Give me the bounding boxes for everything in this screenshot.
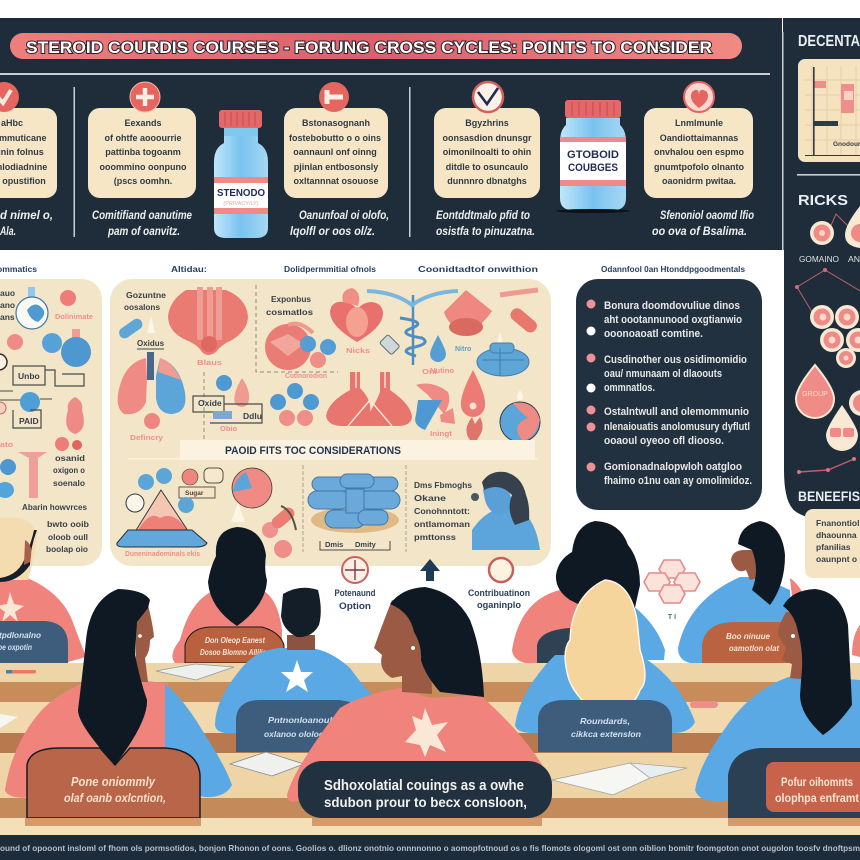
icon: hexagon cluster: T I	[668, 614, 676, 621]
person: front row left	[5, 589, 232, 826]
icon: hexagon cluster	[644, 560, 700, 621]
icon: lungs	[118, 352, 186, 414]
bullet text: ooonoaoatl comtine.	[604, 328, 703, 340]
card 3: oxltannnat osouose	[293, 176, 379, 186]
card 3: pjinlan entbosonsly	[294, 162, 378, 172]
card 3	[284, 108, 388, 198]
label: potential options: Option	[339, 601, 371, 611]
icon: top organ	[168, 287, 248, 355]
icon: hat organ	[444, 290, 492, 336]
left paper	[0, 714, 18, 728]
caption 1: Ala.	[0, 226, 16, 238]
caption 5: oo ova of Bsalima.	[652, 226, 747, 238]
bullet text: oau/ nmunaam ol dlaoouts	[604, 368, 722, 380]
text block: left middle: oxigon o	[53, 465, 85, 475]
caption 3: lqolfl or oos ol/z.	[290, 226, 375, 238]
main panel: anatomy and pills: Nnuic.	[503, 445, 523, 454]
chair: brown right	[702, 622, 790, 663]
chair: blue right: Roundards,	[580, 716, 630, 726]
left panel: anatomy: Dolinimate	[55, 312, 93, 321]
icon: minus badge	[319, 82, 349, 112]
chair: blue centre: Pntnonloanoul	[268, 715, 333, 725]
icon: pink sphere	[232, 468, 272, 508]
column headings: Altidau:	[171, 264, 207, 274]
icon: sphere	[500, 402, 540, 442]
icon: caduceus	[367, 291, 458, 365]
card 2: of ohtfe aooourrie	[104, 133, 182, 143]
caption 4	[436, 210, 535, 238]
icon: badge 1	[0, 82, 19, 112]
card 3: oannaunl onf oinng	[293, 147, 377, 157]
bullets	[586, 300, 596, 472]
icon: pyramid diagram	[117, 468, 223, 558]
bullet text: ooaoul oyeoo ofl diooso.	[604, 435, 724, 447]
risks diagram: GROUP	[802, 391, 828, 398]
pen	[6, 670, 36, 674]
desk rows	[0, 663, 860, 835]
chair: brown front left: olaf oanb oxlcntion,	[64, 793, 166, 805]
card 4: Bgyzhrins	[465, 118, 509, 128]
chair: brown right: oamotlon olat	[729, 643, 780, 653]
text block: woman caption: Okane	[414, 493, 446, 503]
card 2: ooommino oonpuno	[100, 162, 187, 172]
text block: left bottom	[46, 519, 89, 554]
book left	[230, 752, 304, 776]
chair: brown front left	[25, 748, 201, 826]
bottle 1: (PRIVACY/LY)	[223, 201, 259, 207]
chair: blue: tpdlonalno	[0, 630, 41, 640]
caption 1: d nimel o,	[0, 210, 53, 222]
icon: white arrow 2	[496, 332, 504, 348]
bottle 2	[556, 100, 630, 213]
card 4: oimonilnoalti to ohin	[443, 147, 531, 157]
benefits card: dhaounna	[816, 530, 857, 540]
callout: dark speech box: Sdhoxolatial couings as a owhe	[324, 777, 524, 794]
card 2: pattinba togoanm	[105, 147, 181, 157]
icon: paired organs	[326, 372, 412, 426]
caption 5: Sfenoniol oaomd lfio	[660, 210, 754, 222]
bullet text	[604, 300, 752, 487]
text block: woman caption	[414, 480, 472, 542]
icon: pink drop	[461, 370, 485, 417]
card 5: Lnmlmunle	[675, 118, 723, 128]
icon: pyramid diagram: Sugar	[185, 490, 204, 497]
main panel: anatomy and pills: Iningt	[430, 429, 453, 438]
chair: brown: Don Oleop Eanest	[205, 635, 266, 645]
paper sheet	[156, 664, 234, 680]
card 4	[434, 108, 540, 198]
pink pill on desk	[690, 701, 718, 708]
main panel: anatomy and pills: Blaus	[197, 358, 222, 367]
icon: blue tablet stack	[308, 474, 400, 533]
card 4: dunnnro dbnatghs	[447, 176, 527, 186]
chair: blue right: cikkca extenslon	[571, 729, 641, 739]
bottle 2: GTOBOID	[567, 149, 619, 161]
text block: left bottom: boolap oio	[46, 544, 88, 554]
icon: blue woman portrait	[472, 472, 540, 550]
card 3: Bstonasognanh	[302, 118, 370, 128]
card 4: ditdle to osuncaulo	[446, 162, 529, 172]
panel: dark bullet list	[576, 279, 762, 510]
subheading strip	[128, 440, 538, 460]
icon: pink-blue figure	[415, 384, 449, 430]
icon: white arrow	[147, 316, 155, 333]
icon: stomach organ	[265, 324, 313, 370]
caption 3	[290, 210, 389, 238]
person: row two right, blond hair	[515, 580, 695, 752]
chair: brown	[185, 627, 284, 663]
left panel: anatomy: Abarin howvrces	[22, 502, 87, 512]
chair: brown right: Boo ninuue	[726, 631, 770, 641]
label: contributing example	[468, 588, 530, 610]
bullet text: ommnatlos.	[604, 382, 655, 394]
title pill	[10, 33, 742, 59]
bracket label: Dmis	[325, 540, 343, 549]
caption 2: pam of oanvitz.	[107, 226, 180, 238]
bullet text: Bonura doomdovuliue dinos	[604, 300, 740, 312]
chair: blue centre	[236, 700, 350, 752]
chair: blue centre: oxlanoo ololoo	[264, 729, 324, 739]
text block: left top: ans	[0, 312, 15, 322]
gantt chart card	[798, 59, 860, 162]
chair: blue	[0, 621, 68, 663]
text block: left top: auo	[0, 288, 15, 298]
card 3: fostebobutto o o oins	[289, 133, 381, 143]
card 5	[644, 108, 753, 198]
benefits card	[805, 509, 860, 578]
icon: check badge	[473, 82, 503, 112]
icon: heart badge	[684, 82, 714, 112]
text block: left top	[0, 288, 15, 322]
chair: brown: Dosoo Blomno Alliliaa	[200, 647, 270, 657]
label: potential options: Potenaund	[334, 588, 376, 598]
text: expanded cosmetics: Exponbus	[271, 294, 311, 304]
main panel: anatomy and pills	[110, 279, 551, 566]
main panel: anatomy and pills: Nicks	[346, 346, 370, 355]
person: front row right	[695, 589, 860, 826]
main panel: anatomy and pills: Oxidus	[137, 338, 164, 348]
main panel: anatomy and pills: Cotlnorodion	[285, 371, 327, 380]
icon: pink ball	[60, 290, 76, 306]
column headings: Coonidtadtof onwithion	[418, 264, 538, 274]
icon: plus option	[342, 557, 368, 583]
column headings: Odannfool 0an Htonddpgoodmentals	[601, 264, 745, 274]
person: back row right, dark hair over blond	[512, 521, 665, 663]
main panel: anatomy and pills: Nutino	[430, 366, 454, 375]
callout: dark speech box: sdubon prour to becx consloon,	[324, 794, 527, 810]
main panel: anatomy and pills: Defincry	[130, 433, 164, 442]
card 5: Oandiottaimannas	[660, 133, 738, 143]
text block: woman caption: ontlamoman	[414, 519, 470, 529]
column headings	[0, 264, 745, 274]
person: row two centre, man in blue	[215, 588, 373, 752]
risks diagram: GOMAINO	[799, 255, 839, 264]
chair: brown front left: Pone oniommly	[71, 775, 156, 789]
icon: pyramid diagram: Duneninadominals ekis	[125, 549, 200, 558]
text block: left top: ano	[0, 300, 15, 310]
title pill: STEROID COURDIS COURSES - FORUNG CROSS CYCLES: POINTS TO CONSIDER	[26, 38, 712, 57]
card 2: (pscs oomhn.	[114, 176, 172, 186]
bullet text: aht oootannunood oxgtianwio	[604, 314, 742, 326]
bottle 2: COUBGES	[568, 162, 618, 174]
caption 2	[92, 210, 193, 238]
icon: pink capsule	[508, 306, 539, 335]
risks diagram	[795, 206, 860, 474]
bracket label: Dmity	[355, 540, 377, 549]
person: back row centre	[172, 527, 284, 663]
icon: blue drop	[430, 335, 446, 362]
callout: dark speech box	[298, 761, 552, 826]
icon: plus badge	[130, 82, 160, 112]
arrow up	[420, 559, 440, 581]
person: back row far right	[678, 521, 860, 663]
caption 1	[0, 210, 53, 238]
bullet text: Ostalntwull and olemommunio	[604, 406, 749, 418]
icon: heart organ	[330, 288, 383, 342]
left panel: anatomy: Unbo	[18, 371, 40, 381]
left panel: anatomy: PAID	[19, 416, 39, 426]
heading: risks: RICKS	[798, 192, 848, 209]
text block: left middle: soenalo	[53, 478, 85, 488]
icon: blue flask	[61, 329, 91, 367]
card 2: Eexands	[124, 118, 162, 128]
benefits card: oaunpnt o	[816, 554, 857, 564]
subheading strip: PAOID FITS TOC CONSIDERATIONS	[225, 445, 401, 457]
right panel	[782, 18, 860, 578]
main panel: anatomy and pills: Oxide	[198, 398, 222, 408]
main panel: anatomy and pills: Obio	[220, 424, 237, 433]
icon: pink organ	[66, 397, 84, 434]
open book right	[552, 763, 687, 795]
text: cosmetics left	[124, 290, 166, 312]
text block: left bottom: bwto ooib	[47, 519, 89, 529]
caption 3: Oanunfoal oi olofo,	[299, 210, 389, 222]
caption 4: osistfa to pinuzatna.	[436, 226, 535, 238]
bracket label	[320, 540, 390, 550]
bullet text: fhaimo o1nu oan ay omolimidoz.	[604, 475, 752, 487]
risks diagram: AN	[848, 255, 860, 264]
caption 4: Eontddtmalo pfid to	[436, 210, 530, 222]
card 4: oonsasdion dnunsgr	[442, 133, 532, 143]
benefits card: pfanilias	[816, 542, 851, 552]
card 5: onvhalou oen espmo	[654, 147, 745, 157]
text: expanded cosmetics	[266, 294, 313, 317]
person: front row centre	[287, 587, 552, 826]
card 1	[0, 108, 57, 198]
column headings: Dolidpermmitial ofnols	[284, 264, 376, 274]
star emblem	[405, 708, 448, 757]
main panel: anatomy and pills: Nitro	[455, 346, 471, 353]
label: potential options	[334, 588, 376, 611]
bullet text: nlenaiouatis anolomusury dyflutl	[604, 421, 750, 433]
icon: blue pill	[117, 317, 145, 341]
bullet text: Gomionadnalopwloh oatgloo	[604, 461, 742, 473]
card 5: oaonidrm pwitaa.	[662, 176, 736, 186]
icon: drop organ	[234, 378, 249, 407]
text: cosmetics left: oosalons	[124, 302, 160, 312]
text: cosmetics left: Gozuntne	[126, 290, 166, 300]
chair: blue right	[538, 700, 672, 752]
chair: dark with red label	[728, 748, 860, 826]
icon: small pill	[379, 334, 400, 355]
text block: woman caption: Dms Fbmoghs	[414, 480, 472, 490]
main panel: anatomy and pills: Ddlu	[243, 411, 262, 421]
text block: left middle	[53, 453, 85, 488]
left panel: anatomy	[0, 279, 102, 566]
card 5: gnumtpofolo olnanto	[654, 162, 744, 172]
card 1: aHbc	[1, 118, 23, 128]
label: contributing example: Contribuatinon	[468, 588, 530, 598]
caption 5	[652, 210, 754, 238]
caption 2: Comitifiand oanutime	[92, 210, 193, 222]
bullet text: Cusdinother ous osidimomidio	[604, 354, 747, 366]
text block: left bottom: oloob oull	[48, 532, 88, 542]
footer band	[0, 835, 860, 860]
left panel: anatomy: ato	[0, 440, 13, 449]
icon: uterus-shaped organ	[18, 452, 47, 498]
label: contributing example: oganinplo	[477, 600, 522, 610]
text block: woman caption: Conohnntott:	[414, 506, 470, 516]
text block: woman caption: pmttonss	[414, 532, 456, 542]
icon: circle option	[489, 558, 513, 582]
bottle 1	[214, 110, 268, 238]
text block: left middle: osanid	[55, 453, 85, 463]
icon: blue tablets	[477, 343, 529, 376]
card 2	[88, 108, 196, 198]
main panel: anatomy and pills: Oni	[422, 367, 437, 376]
icon: flask	[16, 287, 48, 329]
top banner panel	[0, 18, 782, 250]
person: back row left, blond	[0, 518, 86, 663]
text: expanded cosmetics: cosmatlos	[266, 307, 313, 317]
bottle 1: STENODO	[217, 187, 265, 199]
